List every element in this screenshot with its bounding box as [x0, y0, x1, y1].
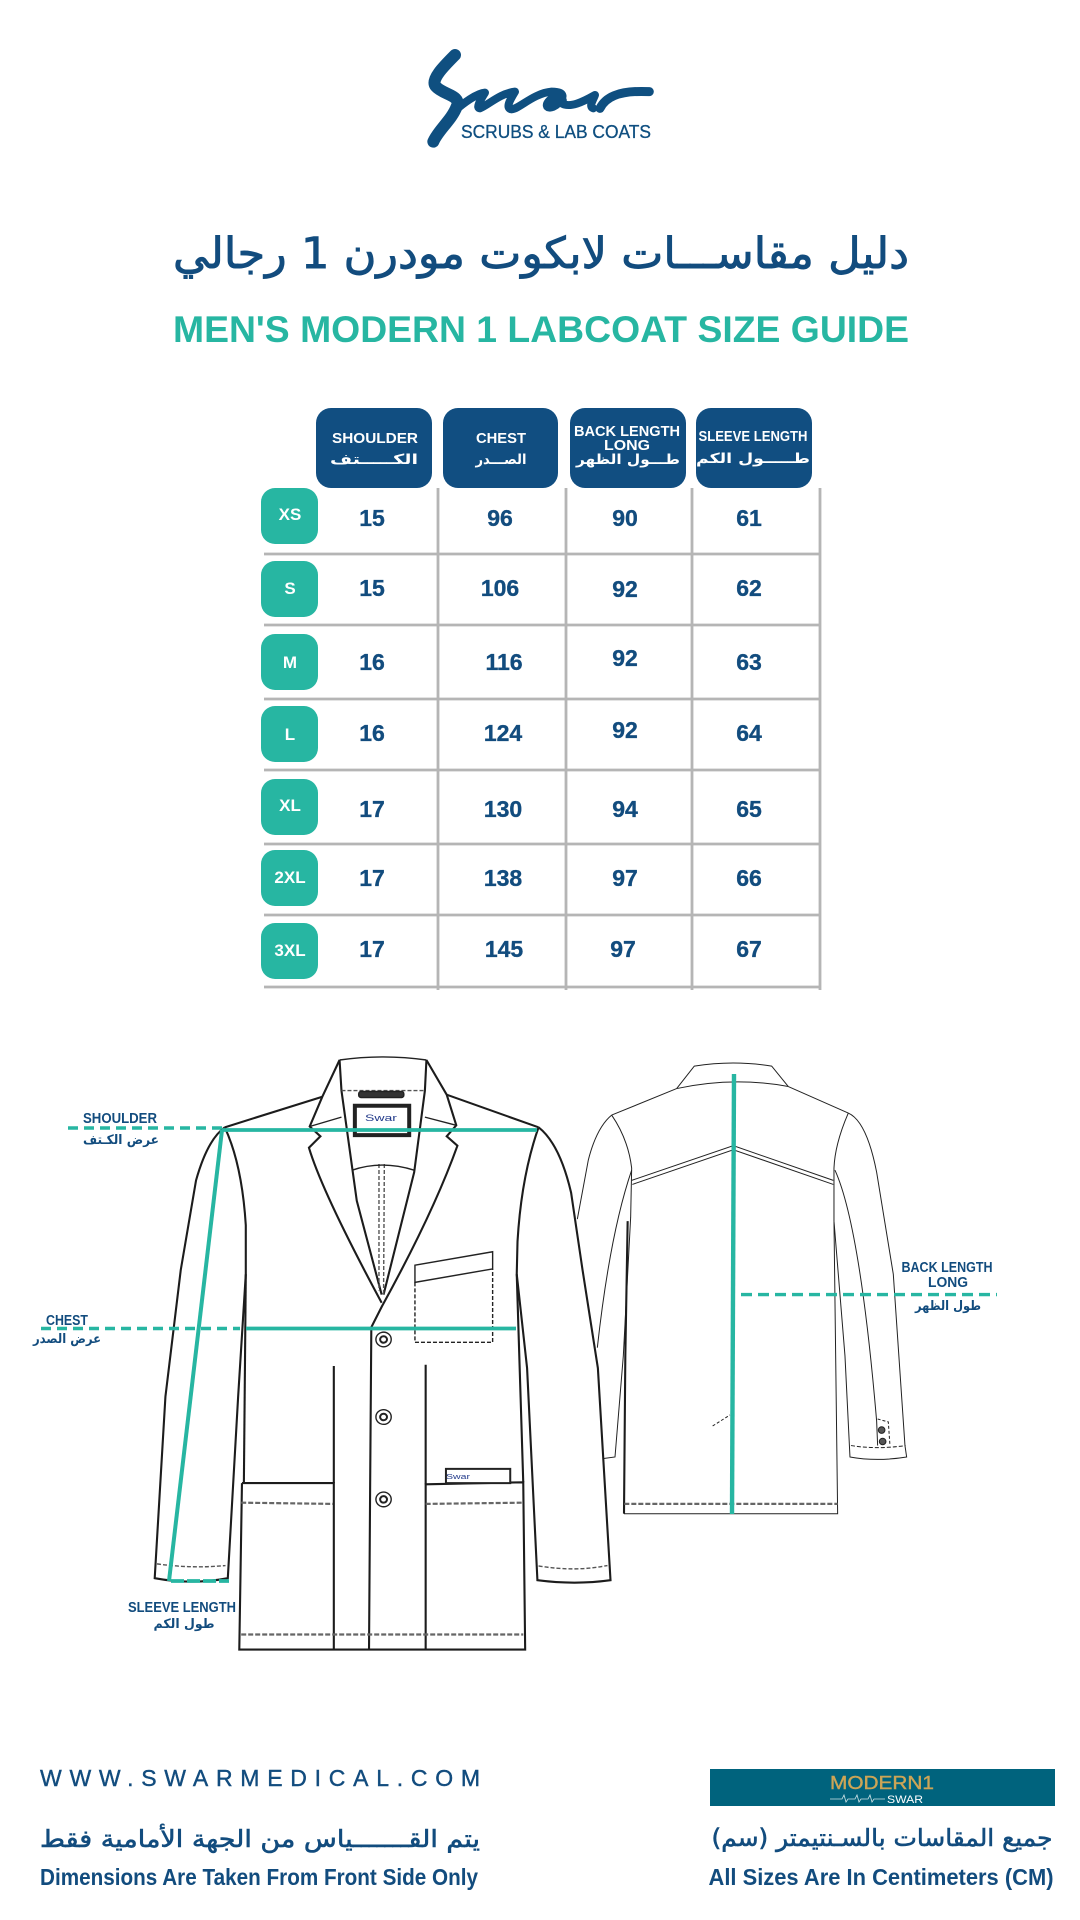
row 3XL: 67: [736, 936, 762, 962]
row XL: [261, 779, 762, 835]
row 2XL: 2XL: [274, 868, 306, 887]
row 3XL: 97: [610, 936, 636, 962]
coat pocket card brand: Swar: [446, 1474, 471, 1481]
table header: sleeve length: [696, 408, 812, 488]
table header: back length: BACK LENGTH: [574, 424, 680, 440]
table header: sleeve length: طـــــول الكم: [696, 451, 810, 467]
row 3XL: 145: [485, 936, 523, 962]
label: back length: [902, 1260, 992, 1314]
measure line: shoulder: [68, 1128, 537, 1130]
row S: 106: [481, 575, 519, 601]
row 2XL: 17: [359, 865, 385, 891]
label: shoulder: SHOULDER: [83, 1111, 157, 1127]
row XL: XL: [279, 796, 301, 815]
label: shoulder: عرض الكـتف: [83, 1133, 159, 1148]
row 2XL: 66: [736, 865, 762, 891]
row 3XL: 17: [359, 936, 385, 962]
label: sleeve length: [128, 1600, 236, 1632]
row L: L: [285, 725, 295, 744]
title: Arabic heading: دليل مقاســـات لابكوت مودرن 1 رجالي: [173, 229, 909, 279]
row XS: [261, 488, 762, 544]
table header: chest: الصـــدر: [475, 452, 526, 468]
title: English heading: MEN'S MODERN 1 LABCOAT SIZE GUIDE: [173, 309, 909, 350]
label: sleeve length: SLEEVE LENGTH: [128, 1600, 236, 1616]
table header: back length: طـــول الظهر: [575, 452, 680, 468]
row XL: 17: [359, 796, 385, 822]
label: shoulder: [83, 1111, 159, 1148]
row XS: 90: [612, 505, 638, 531]
table header: sleeve length: SLEEVE LENGTH: [698, 429, 808, 445]
table header: shoulder: [316, 408, 432, 488]
row M: [261, 634, 762, 690]
row S: 62: [736, 575, 762, 601]
table header: chest: CHEST: [476, 431, 526, 447]
row S: S: [284, 579, 296, 598]
row M: 16: [359, 649, 385, 675]
measure line: sleeve: [169, 1130, 229, 1581]
row XS: 61: [736, 505, 762, 531]
row XS: 15: [359, 505, 385, 531]
row 2XL: [261, 850, 762, 906]
row 3XL: [261, 923, 762, 979]
footer right: Modern1 banner: MODERN1: [830, 1773, 934, 1793]
logo mark: Swar script: [433, 55, 649, 142]
label: chest: CHEST: [46, 1313, 88, 1329]
row M: M: [283, 653, 297, 672]
measure line: back length: [732, 1074, 997, 1514]
row 2XL: 97: [612, 865, 638, 891]
table header: back length: LONG: [604, 438, 650, 454]
row S: 92: [612, 576, 638, 602]
label: back length: طول الظهر: [914, 1299, 981, 1314]
footer left: Arabic note: يتم القـــــــياس من الجهة الأمامية فقط: [40, 1824, 480, 1853]
table header: shoulder: الكـــــتف: [330, 452, 418, 468]
footer right: Modern1 banner: [710, 1769, 1055, 1806]
footer left: website: WWW.SWARMEDICAL.COM: [40, 1765, 480, 1791]
label: sleeve length: طول الكم: [154, 1617, 214, 1632]
table header: chest: [443, 408, 558, 488]
row XL: 130: [484, 796, 522, 822]
label: chest: [32, 1313, 101, 1347]
footer right: Arabic note: جميع المقاسات بالسـنتيمتر (سم): [712, 1824, 1052, 1852]
row L: 16: [359, 720, 385, 746]
label: chest: عرض الصدر: [32, 1332, 101, 1347]
coat neck label brand: Swar: [365, 1113, 397, 1123]
row L: [261, 706, 762, 762]
footer right: Modern1 banner: SWAR: [887, 1794, 923, 1806]
row M: 92: [612, 645, 638, 671]
table header: back length: [570, 408, 686, 488]
footer right: English note: All Sizes Are In Centimeters (CM): [708, 1864, 1054, 1890]
table header: shoulder: SHOULDER: [332, 431, 419, 447]
logo: Swar scrubs and lab coats: [433, 55, 651, 142]
row L: 64: [736, 720, 762, 746]
label: back length: BACK LENGTH: [902, 1260, 992, 1276]
measure line: chest: [41, 1327, 516, 1330]
row 3XL: 3XL: [274, 941, 306, 960]
row M: 63: [736, 649, 762, 675]
row S: [261, 561, 762, 617]
row L: 124: [484, 720, 522, 746]
row 2XL: 138: [484, 865, 522, 891]
logo tagline: SCRUBS & LAB COATS: [461, 122, 651, 142]
size table: [261, 408, 821, 990]
footer left: English note: Dimensions Are Taken From Front Side Only: [40, 1864, 478, 1890]
row XS: 96: [487, 505, 513, 531]
row XL: 65: [736, 796, 762, 822]
row XL: 94: [612, 796, 638, 822]
row S: 15: [359, 575, 385, 601]
label: back length: LONG: [928, 1275, 968, 1291]
row XS: XS: [279, 505, 301, 524]
row M: 116: [485, 649, 523, 675]
row L: 92: [612, 717, 638, 743]
front view of lab coat: [155, 1057, 611, 1650]
back view of lab coat: [577, 1063, 907, 1514]
